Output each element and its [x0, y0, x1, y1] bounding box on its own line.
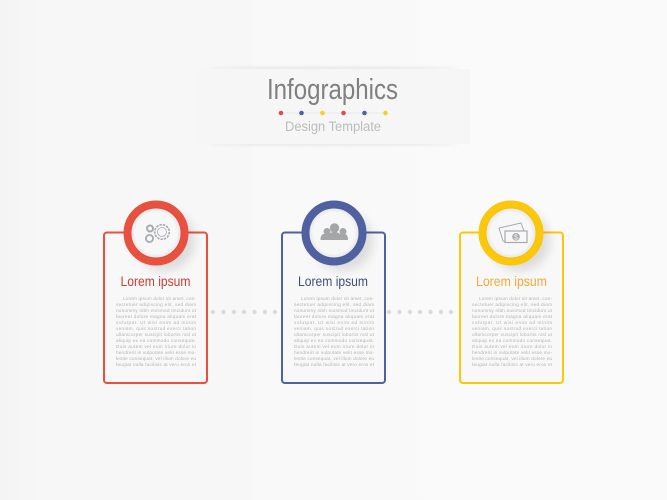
title banner — [196, 67, 470, 145]
connector dots right — [387, 310, 453, 314]
red card body text — [116, 296, 197, 367]
red card heading: Lorem ipsum — [120, 274, 190, 289]
icon: banknotes — [499, 223, 527, 242]
dotted colour line — [279, 111, 388, 115]
icon: people — [320, 223, 348, 240]
blue card ring — [306, 204, 373, 271]
yellow card body text — [472, 296, 553, 367]
subtitle: Design Template — [285, 118, 381, 134]
connector dots left — [211, 310, 277, 314]
blue card body text — [294, 296, 375, 367]
panel: red card — [104, 204, 207, 383]
title: Infographics — [267, 74, 398, 106]
icon: banknotes: $ — [514, 234, 518, 241]
red card ring — [128, 204, 195, 271]
panel: blue card — [282, 204, 385, 383]
yellow card heading: Lorem ipsum — [476, 274, 547, 289]
yellow card ring — [482, 204, 550, 271]
icon: gears — [146, 225, 169, 242]
panel: yellow card — [460, 204, 563, 383]
blue card heading: Lorem ipsum — [298, 274, 368, 289]
